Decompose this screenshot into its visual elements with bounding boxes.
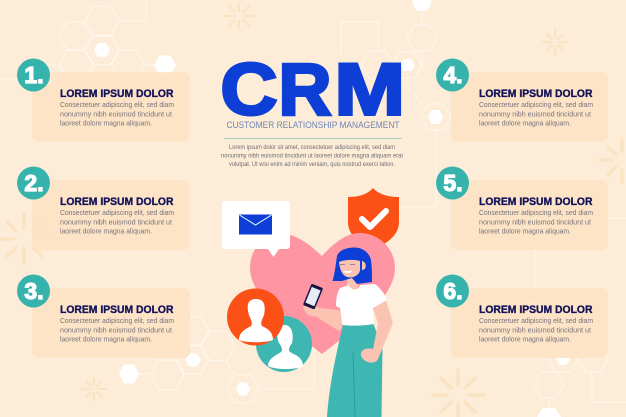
panel 3 heading: LOREM IPSUM DOLOR: [60, 304, 174, 316]
subtitle divider: [224, 138, 402, 139]
subtitle: CUSTOMER RELATIONSHIP MANAGEMENT: [226, 120, 400, 130]
panel 5 body text: nonummy nibh euismod tincidunt ut: [479, 218, 591, 226]
icon: email speech bubble: [222, 201, 290, 257]
panel 1 body text: Consectetuer adipiscing elit, sed diam: [60, 100, 174, 109]
panel 1 number badge: 1.: [24, 62, 44, 88]
title: CRM: R: [278, 50, 332, 130]
panel 6 body text: Consectetuer adipiscing elit, sed diam: [479, 316, 593, 325]
panel 5: [436, 166, 608, 250]
panel 1 number badge: [17, 58, 50, 92]
title: CRM: M: [334, 50, 405, 130]
arm holding phone: [303, 300, 342, 331]
panel 6 heading: LOREM IPSUM DOLOR: [479, 304, 593, 316]
panel 2 body text: laoreet dolore magna aliquam.: [60, 226, 152, 236]
icon: orange customer avatar: [227, 288, 284, 346]
panel 4 heading: LOREM IPSUM DOLOR: [479, 88, 593, 100]
intro text: Lorem ipsum dolor sit amet, consectetuer adipiscing elit, sed diam: [229, 144, 395, 151]
panel 1 body text: laoreet dolore magna aliquam.: [60, 118, 152, 128]
panel 4: [436, 58, 608, 142]
panel 5 body text: laoreet dolore magna aliquam.: [479, 226, 571, 236]
title: CRM: C: [220, 50, 278, 130]
panel 2 body text: nonummy nibh euismod tincidunt ut: [60, 218, 172, 226]
phone: [303, 284, 323, 310]
panel 4 body text: Consectetuer adipiscing elit, sed diam: [479, 100, 593, 109]
panel 2 heading: LOREM IPSUM DOLOR: [60, 196, 174, 208]
other arm: [361, 297, 393, 363]
panel 1 body text: nonummy nibh euismod tincidunt ut: [60, 110, 172, 118]
panel 3 body text: [60, 316, 174, 344]
icon: teal customer avatar: [256, 316, 312, 372]
panel 2: [17, 166, 190, 250]
panel 1 heading: LOREM IPSUM DOLOR: [60, 88, 174, 100]
trousers: [327, 323, 382, 417]
intro text: [221, 144, 403, 168]
eyes: [340, 264, 355, 266]
panel 5 body text: Consectetuer adipiscing elit, sed diam: [479, 208, 593, 217]
panel 6 body text: [479, 316, 593, 344]
neck: [347, 276, 358, 290]
face: [339, 260, 360, 277]
panel 2 body text: Consectetuer adipiscing elit, sed diam: [60, 208, 174, 217]
panel 5 number badge: [436, 166, 469, 200]
panel 3 body text: nonummy nibh euismod tincidunt ut: [60, 326, 172, 334]
illustration: heart: [250, 233, 395, 354]
panel 5 heading: LOREM IPSUM DOLOR: [479, 196, 593, 208]
panel 6 body text: nonummy nibh euismod tincidunt ut: [479, 326, 591, 334]
smile: [343, 271, 352, 273]
icon: shield with check: [348, 188, 399, 249]
panel 2 number badge: [17, 166, 50, 200]
panel 3: [17, 274, 190, 358]
panel 3 body text: Consectetuer adipiscing elit, sed diam: [60, 316, 174, 325]
shirt: [336, 284, 387, 326]
panel 3 number badge: 3.: [24, 278, 44, 304]
panel 2 body text: [60, 208, 174, 236]
panel 6 number badge: 6.: [443, 278, 463, 304]
panel 3 number badge: [17, 274, 50, 308]
panel 1 body text: [60, 100, 174, 128]
panel 6: [436, 274, 608, 358]
panel 4 number badge: [436, 58, 469, 92]
ear: [362, 261, 366, 270]
panel 4 body text: [479, 100, 593, 128]
panel 4 body text: laoreet dolore magna aliquam.: [479, 118, 571, 128]
illustration: woman with phone: [303, 247, 393, 417]
panel 3 body text: laoreet dolore magna aliquam.: [60, 334, 152, 344]
intro text: volutpat. Ut wisi enim ad minim veniam, quis nostrud exerci tation.: [229, 161, 395, 168]
panel 6 number badge: [436, 274, 469, 308]
panel 2 number badge: 2.: [24, 170, 44, 196]
intro text: nonummy nibh euismod tincidunt ut laoreet dolore magna aliquam erat: [221, 152, 403, 160]
panel 4 body text: nonummy nibh euismod tincidunt ut: [479, 110, 591, 118]
panel 4 number badge: 4.: [443, 62, 463, 88]
panel 5 body text: [479, 208, 593, 236]
panel 5 number badge: 5.: [443, 170, 463, 196]
hair: [332, 247, 372, 284]
panel 6 body text: laoreet dolore magna aliquam.: [479, 334, 571, 344]
panel 1: [17, 58, 190, 142]
title: CRM: [220, 50, 405, 130]
